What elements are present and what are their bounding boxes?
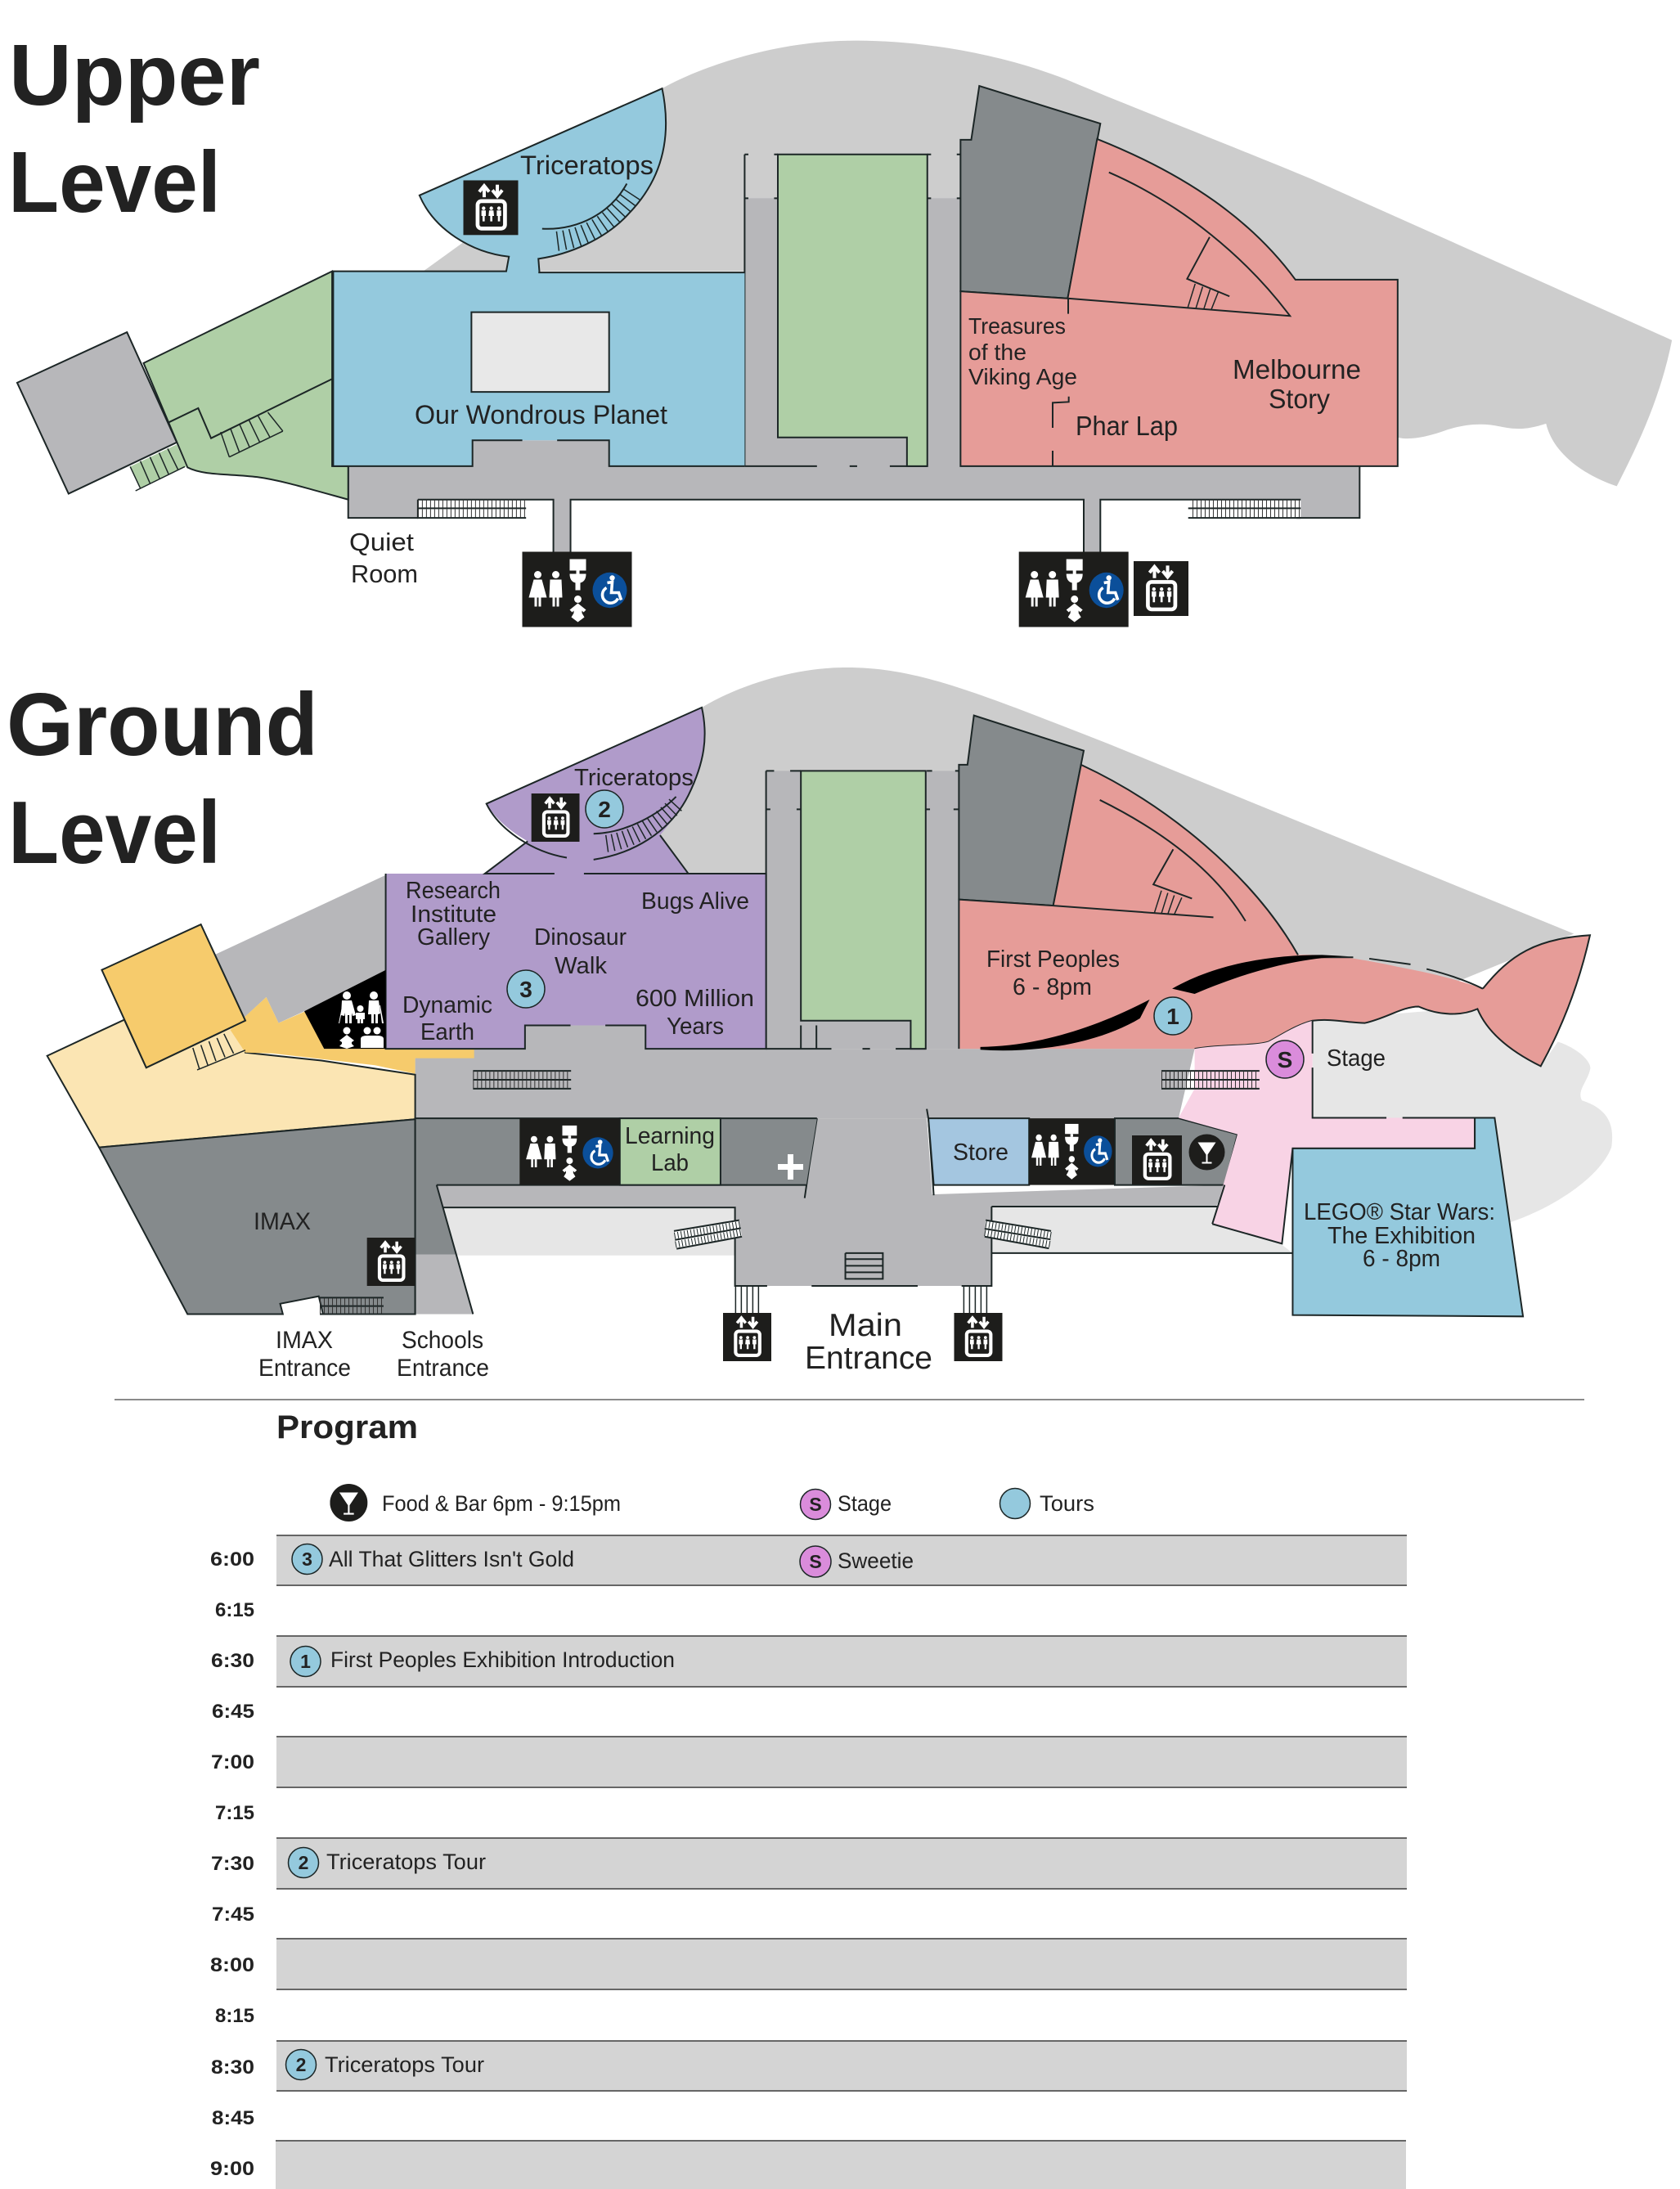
icon: lift, main entrance right — [954, 1313, 1003, 1361]
cream gallery — [47, 1020, 416, 1148]
IMAX — [99, 1119, 416, 1314]
program item: Sweetie — [800, 1546, 914, 1577]
icon: lift, main entrance left — [723, 1313, 771, 1361]
upper level room labels: Story — [1269, 384, 1330, 414]
ground level room labels: 6 - 8pm — [1013, 974, 1092, 1000]
level title: Upper Level: Level — [8, 134, 221, 231]
stage marker S — [1266, 1041, 1304, 1078]
level title: Ground Level: Level — [8, 783, 221, 883]
upper level room labels — [349, 151, 1361, 588]
program item: All That Glitters Isn't Gold: All That Glitters Isn't Gold — [329, 1547, 574, 1571]
ground level room labels — [254, 765, 1495, 1382]
tour marker 3 — [507, 970, 545, 1008]
upper level floor plan — [8, 27, 1672, 627]
central courtyard garden — [778, 155, 928, 466]
icon: lift, bar area — [1132, 1135, 1182, 1184]
hall escalators — [473, 1071, 1260, 1089]
level title: Upper Level — [8, 27, 260, 231]
upper level shapes — [17, 41, 1672, 551]
time labels: 7:30 — [211, 1853, 254, 1875]
green gallery inner wall — [168, 379, 332, 438]
program item: Triceratops Tour 7:30 — [288, 1847, 486, 1878]
green gallery stairs — [221, 412, 283, 457]
corridor walls — [348, 155, 1359, 551]
corridor walls — [766, 771, 959, 1049]
ground level room labels: Entrance — [258, 1355, 351, 1382]
upper level room labels: Melbourne — [1233, 354, 1361, 384]
icon: lift, upper right — [1134, 561, 1188, 616]
program item: First Peoples Exhibition Introduction: 1 — [300, 1651, 311, 1672]
ground level room labels: Stage — [1327, 1045, 1386, 1072]
upper level room labels: Our Wondrous Planet — [415, 400, 667, 429]
dark grey block — [960, 86, 1100, 299]
front forecourt lines — [991, 1252, 1292, 1254]
upper level room labels: Room — [351, 560, 418, 588]
time labels: 7:15 — [215, 1802, 254, 1824]
ground level room labels: First Peoples — [986, 946, 1120, 973]
Triceratops curved stairs — [542, 183, 633, 241]
left green gallery — [144, 272, 348, 500]
building silhouette — [423, 41, 1672, 486]
vertical corridors — [766, 771, 959, 1049]
front angled escalators — [674, 1220, 1051, 1249]
front lobby walls — [442, 1109, 1224, 1286]
darker band behind family room — [214, 875, 386, 1025]
ground level room labels: Store — [953, 1139, 1008, 1166]
First Peoples stairs — [1154, 891, 1182, 915]
time labels — [210, 1548, 254, 2180]
legend: stage — [800, 1489, 892, 1520]
Dinosaur Walk gallery — [386, 708, 766, 1049]
cream gallery stairs — [193, 1034, 245, 1070]
time labels: 7:00 — [211, 1751, 254, 1773]
ground level shapes — [47, 667, 1612, 1316]
ground level room labels: Learning — [625, 1123, 715, 1149]
time labels: 6:30 — [211, 1650, 254, 1672]
program item: All That Glitters Isn't Gold — [292, 1544, 574, 1574]
program item: Sweetie: Sweetie — [838, 1548, 914, 1573]
central atrium void — [471, 312, 609, 392]
left toilets block — [519, 1118, 620, 1185]
grey block — [17, 332, 177, 494]
main entrance stairs — [846, 1253, 883, 1279]
time labels: 6:15 — [215, 1599, 254, 1621]
ground level room labels: Bugs Alive — [641, 888, 749, 915]
program item: First Peoples Exhibition Introduction: First Peoples Exhibition Introduction — [330, 1647, 675, 1672]
corridors — [348, 198, 1359, 551]
tour marker 2 — [586, 790, 623, 828]
ground level room labels: Dinosaur — [534, 924, 627, 951]
program item: Triceratops Tour 7:30: 2 — [299, 1852, 308, 1873]
upper level room labels: Viking Age — [968, 364, 1077, 389]
Dinosaur Walk walls — [386, 708, 766, 1049]
legend: tours — [999, 1489, 1094, 1518]
Melbourne Story stairs — [1188, 284, 1218, 310]
legend — [330, 1484, 1094, 1522]
IMAX entrance stairs — [320, 1297, 384, 1314]
legend: stage: S — [809, 1494, 822, 1515]
stairs to right entrance lift — [964, 1286, 991, 1313]
ground level room labels: 600 Million — [636, 986, 754, 1012]
time labels: 8:30 — [211, 2056, 254, 2079]
ground level room labels: IMAX — [276, 1327, 333, 1354]
icon: toilets, upper right — [1019, 551, 1129, 627]
legend: tours: Tours — [1040, 1491, 1094, 1516]
stage open area — [1313, 1006, 1612, 1223]
tour marker 1: 1 — [1166, 1004, 1179, 1029]
left escalator — [418, 500, 526, 518]
black wall accents — [981, 955, 1349, 1050]
program section — [210, 1409, 1407, 2189]
ground level room labels: Gallery — [417, 924, 490, 951]
ground level room labels: 6 - 8pm — [1363, 1246, 1440, 1272]
grey block stairs — [130, 444, 186, 491]
ground level room labels: Lab — [651, 1150, 689, 1176]
ground level floor plan — [7, 667, 1612, 1382]
family room — [304, 970, 386, 1049]
time labels: 6:00 — [210, 1548, 254, 1571]
icon: lift, Triceratops — [463, 180, 519, 235]
level title: Ground Level: Ground — [7, 675, 318, 775]
First Peoples gallery and Stage wing — [959, 765, 1590, 1066]
program item: Triceratops Tour 7:30: Triceratops Tour — [326, 1850, 486, 1874]
program item: Triceratops Tour 8:30: Triceratops Tour — [325, 2052, 484, 2077]
time labels: 8:00 — [210, 1954, 254, 1976]
Our Wondrous Planet and Triceratops gallery — [333, 88, 744, 466]
central courtyard garden — [801, 771, 926, 1049]
front forecourt areas — [442, 1207, 1292, 1256]
orange lobby strip — [231, 997, 474, 1074]
ground level room labels: Research — [406, 878, 501, 904]
gallery outline — [333, 88, 744, 466]
upper level room labels: Treasures — [968, 313, 1066, 339]
ground level room labels: Entrance — [397, 1355, 489, 1382]
legend: food and bar — [330, 1484, 621, 1522]
ground level room labels: Triceratops — [574, 765, 694, 791]
upper level room labels: Quiet — [349, 528, 414, 556]
divider line — [115, 1399, 1584, 1400]
ground level room labels: Dynamic — [402, 992, 492, 1018]
ground level room labels: Main — [829, 1308, 902, 1343]
program heading: Program — [276, 1409, 418, 1445]
time labels: 8:45 — [212, 2107, 254, 2129]
upper level room labels: Triceratops — [520, 151, 654, 180]
Triceratops curved stairs — [594, 797, 678, 843]
legend: food and bar: Food & Bar 6pm - 9:15pm — [382, 1491, 621, 1516]
icon: toilets, upper left — [522, 551, 631, 627]
program item: Sweetie: S — [809, 1551, 822, 1572]
Melbourne Story gallery — [960, 139, 1398, 466]
Melbourne Story inner walls — [1053, 173, 1290, 466]
level title: Ground Level — [7, 675, 318, 883]
ground level room labels: The Exhibition — [1327, 1223, 1476, 1249]
program item: All That Glitters Isn't Gold: 3 — [302, 1548, 312, 1570]
level title: Upper Level: Upper — [9, 27, 260, 124]
stage foyer — [1179, 1021, 1475, 1243]
icon: toilets, Store — [1031, 1124, 1112, 1180]
entrance hall — [437, 1118, 1227, 1286]
ground level room labels: Years — [667, 1014, 724, 1040]
upper level room labels: of the — [968, 339, 1026, 365]
right toilets block — [1029, 1118, 1115, 1185]
ground level room labels: Schools — [402, 1327, 483, 1354]
schedule bands — [276, 1535, 1407, 2189]
tour marker 2: 2 — [598, 797, 611, 822]
First Peoples walls — [959, 765, 1590, 1066]
legend: stage: Stage — [838, 1491, 892, 1516]
ground level room labels: Walk — [555, 953, 607, 979]
orange square block — [101, 924, 245, 1068]
time labels: 6:45 — [212, 1701, 254, 1723]
ground level room labels: Institute — [411, 901, 496, 928]
tour marker 1 — [1154, 997, 1192, 1035]
ground level room labels: Entrance — [805, 1341, 932, 1376]
time labels: 9:00 — [210, 2158, 254, 2180]
bar area — [1115, 1118, 1238, 1185]
LEGO Star Wars gallery — [1292, 1118, 1523, 1316]
dark grey block — [959, 716, 1084, 906]
tour marker 3: 3 — [519, 977, 532, 1002]
stage marker S: S — [1278, 1047, 1292, 1072]
schools entrance corridor — [416, 1255, 473, 1314]
Learning Lab — [620, 1118, 721, 1185]
stage walls — [1212, 1021, 1475, 1243]
program item: Triceratops Tour 8:30: 2 — [296, 2054, 306, 2075]
dark corridor strip — [416, 1118, 817, 1255]
ground level room labels: LEGO® Star Wars: — [1304, 1199, 1495, 1225]
schools entrance walls — [416, 1118, 817, 1314]
Store — [928, 1118, 1029, 1185]
upper level room labels: Phar Lap — [1076, 411, 1178, 441]
icon: white cross first aid — [778, 1154, 803, 1180]
icon: toilets, Learning Lab — [526, 1126, 613, 1181]
stairs to left entrance lift — [735, 1286, 761, 1313]
program item: Triceratops Tour 8:30 — [286, 2050, 484, 2079]
icon: family room — [339, 991, 384, 1049]
ground level room labels: IMAX — [254, 1208, 311, 1235]
time labels: 8:15 — [215, 2005, 254, 2027]
main hall — [416, 1025, 1195, 1118]
time labels: 7:45 — [212, 1904, 254, 1926]
ground level room labels: Earth — [420, 1019, 474, 1045]
right escalator — [1188, 504, 1300, 518]
icon: lift, Triceratops — [532, 793, 580, 842]
icon: bar — [1189, 1134, 1225, 1170]
icon: lift, IMAX — [367, 1238, 416, 1286]
building silhouette — [536, 667, 1574, 1030]
